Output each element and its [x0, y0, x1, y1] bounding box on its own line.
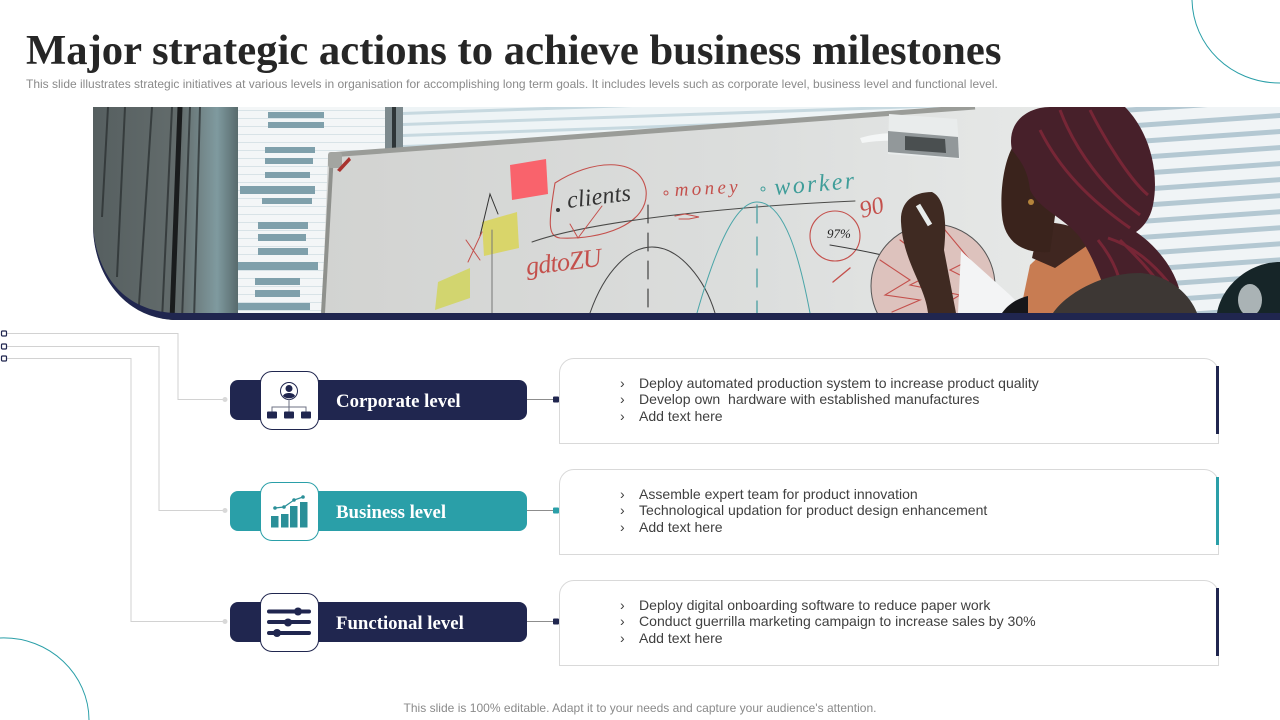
icon: organisation hierarchy [260, 371, 319, 430]
handwritten words: worker [773, 168, 856, 201]
card: corporate level actions: › [620, 375, 625, 391]
connectors: pills to cards [527, 396, 559, 624]
audience shoulder object [1217, 262, 1280, 316]
card: business level actions: Add text here [639, 519, 723, 535]
corporate level pill: Corporate level [336, 391, 461, 412]
card: business level actions: › [620, 486, 625, 502]
card: functional level actions: Add text here [639, 630, 723, 646]
woman [901, 107, 1179, 313]
card: corporate level actions [559, 358, 1219, 444]
paper sheet [958, 251, 1016, 313]
icon: rising bar chart [260, 482, 319, 541]
decorative corner arc: top right [1192, 0, 1280, 84]
handwritten words: money [674, 177, 739, 201]
card: corporate level actions: › [620, 408, 625, 424]
functional level pill [230, 602, 527, 642]
connector lines from left markers [0, 330, 228, 624]
card: business level actions [559, 469, 1219, 555]
corporate level pill [230, 380, 527, 420]
footer note: This slide is 100% editable. Adapt it to your needs and capture your audience's attention. [403, 701, 877, 715]
handwritten words: 97% [827, 226, 851, 241]
card: corporate level actions: › [620, 391, 625, 407]
marker holder [888, 114, 960, 159]
window frame and upper blinds [385, 107, 939, 148]
icon: sliders [260, 593, 319, 652]
card: functional level actions: › [620, 630, 625, 646]
handwritten words: 90 [857, 192, 887, 224]
card: business level actions: Technological updation for product design enhancement [639, 502, 987, 518]
photo: woman writing on a whiteboard [93, 107, 1280, 320]
card: functional level actions: › [620, 613, 625, 629]
card: corporate level actions: Develop own hardware with established manufactures [639, 391, 979, 407]
card: functional level actions: › [620, 597, 625, 613]
card: business level actions: Assemble expert team for product innovation [639, 486, 918, 502]
dark sleeve [1002, 296, 1028, 313]
functional level pill: Functional level [336, 613, 464, 634]
whiteboard writing [466, 164, 996, 313]
subtitle: This slide illustrates strategic initiatives at various levels in organisation for accomplishing long term goals. It includes levels such as corporate level, business level and functional level. [26, 77, 998, 91]
audience head [1053, 273, 1197, 313]
handwritten words: clients [566, 180, 632, 214]
card: corporate level actions: Deploy automated production system to increase product quality [639, 375, 1039, 391]
navy band [93, 225, 1280, 320]
decorative corner arc: bottom left [0, 637, 90, 720]
handwritten words: gdtoZU [524, 243, 605, 281]
card: business level actions: › [620, 502, 625, 518]
card: corporate level actions: Add text here [639, 408, 723, 424]
business level pill: Business level [336, 502, 446, 523]
whiteboard [322, 107, 1120, 313]
left window with blinds [238, 107, 385, 313]
card: functional level actions: Deploy digital onboarding software to reduce paper work [639, 597, 990, 613]
sticky notes [435, 159, 548, 310]
business level pill [230, 491, 527, 531]
card: functional level actions: Conduct guerrilla marketing campaign to increase sales by 30% [639, 613, 1036, 629]
card: functional level actions [559, 580, 1219, 666]
handwritten words [524, 168, 887, 281]
card: business level actions: › [620, 519, 625, 535]
right window blinds [1126, 107, 1280, 313]
curtain [93, 107, 239, 320]
title: Major strategic actions to achieve business milestones [26, 27, 1001, 74]
